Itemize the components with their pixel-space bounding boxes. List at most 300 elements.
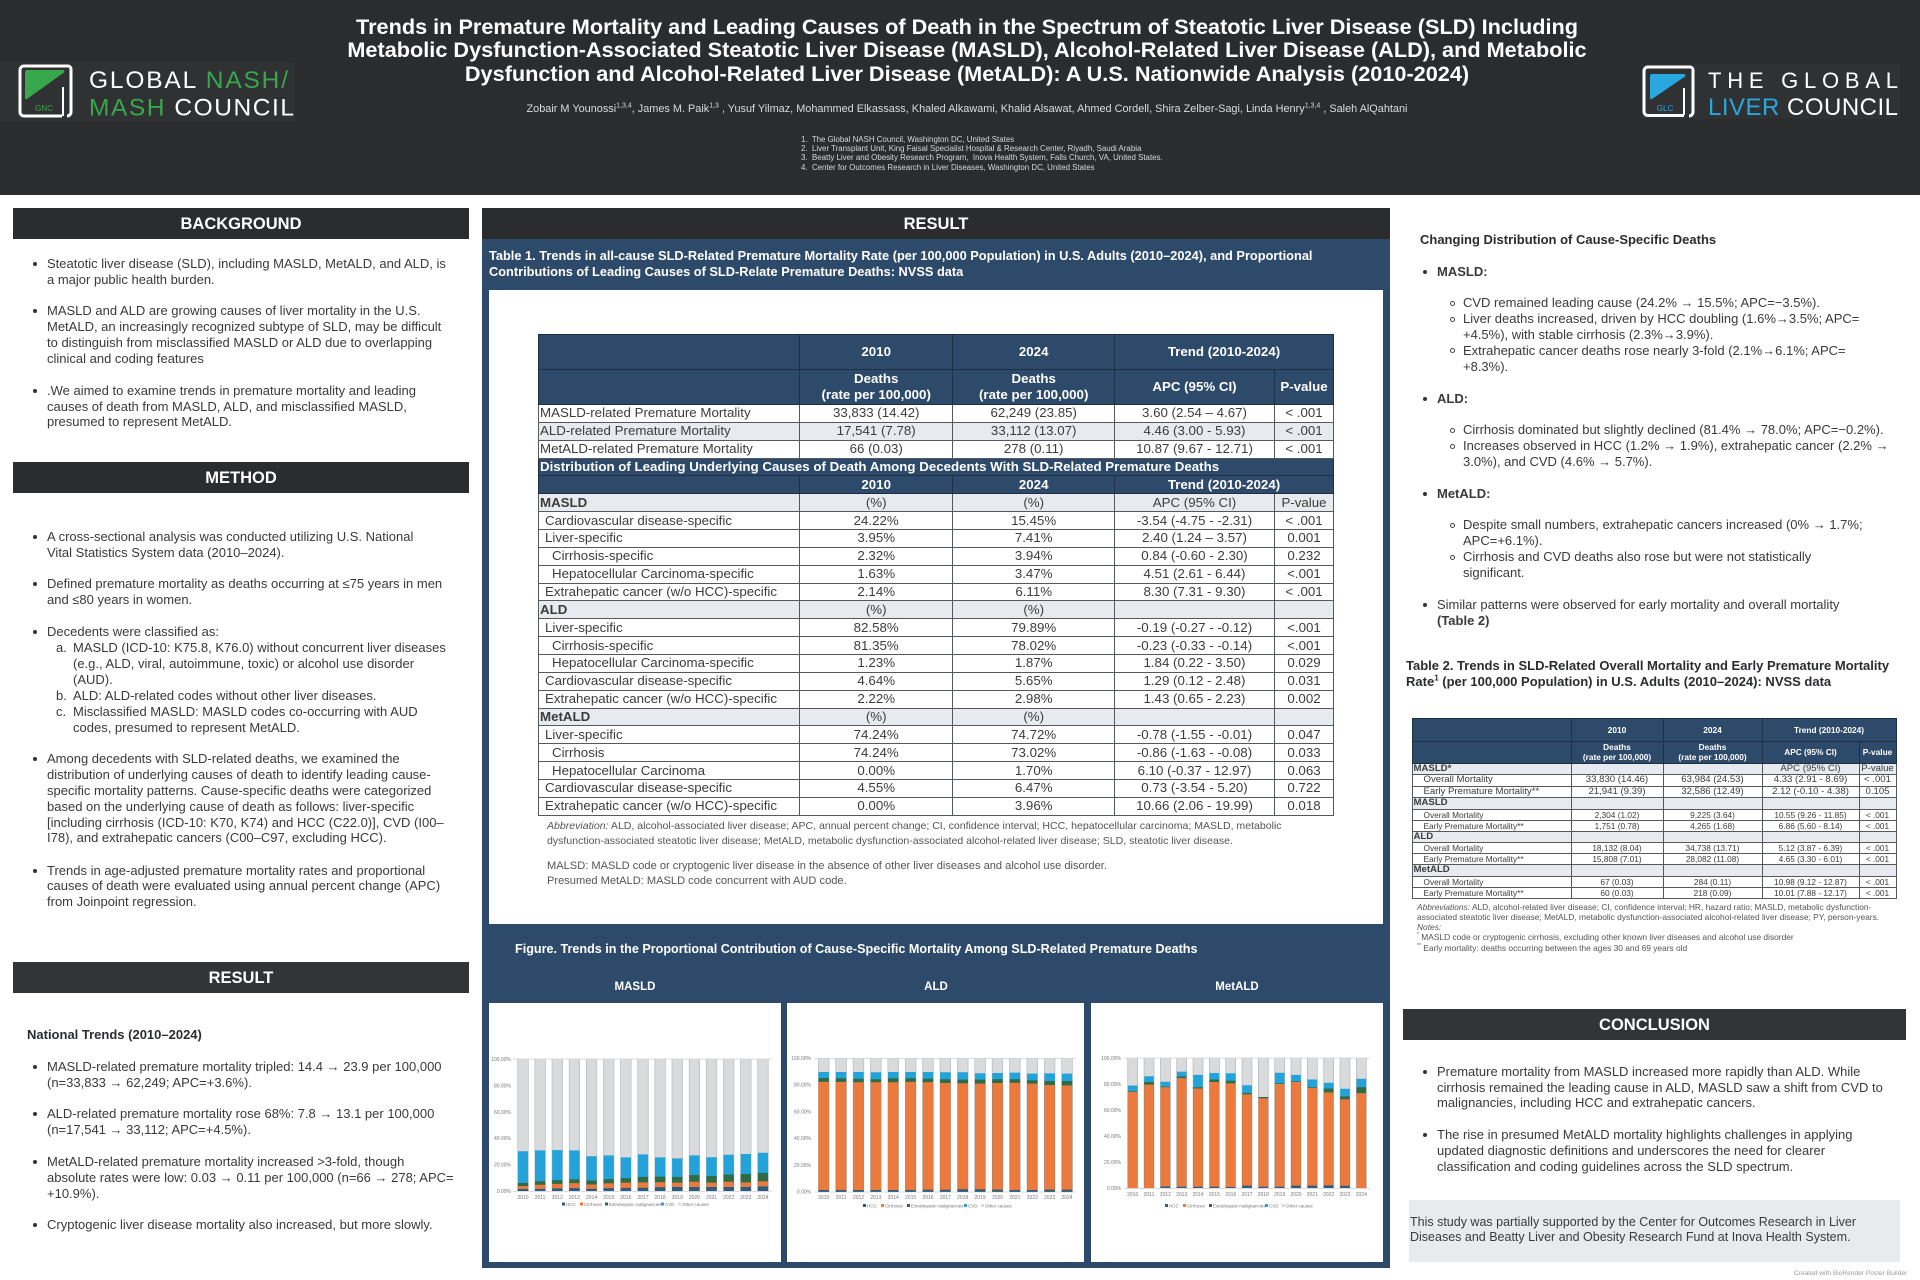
table 1: (%) xyxy=(1023,495,1044,510)
table 1: 4.64% xyxy=(857,673,895,688)
table 2: Overall Mortality xyxy=(1424,810,1483,820)
x axis labels: 2019 xyxy=(1274,1192,1285,1198)
bullet: joinpoint: from Joinpoint regression. xyxy=(47,894,197,909)
table 1: 2.14% xyxy=(857,584,895,599)
table 1: APC (95% CI) xyxy=(1152,379,1237,394)
table 1: 3.96% xyxy=(1015,798,1053,813)
bullet: SLD burden: a major public health burden. xyxy=(47,272,215,287)
table 1: 6.47% xyxy=(1015,780,1053,795)
legend: CVD xyxy=(968,1204,978,1208)
bullet: growing causes: clinical and coding features xyxy=(47,351,204,366)
conclusion text xyxy=(1423,1064,1883,1174)
table 1: MASLD xyxy=(540,495,587,510)
y axis labels: 100.00% xyxy=(791,1056,812,1062)
table 2: 63,984 (24.53) xyxy=(1681,774,1744,785)
chart heading ALD: ALD xyxy=(924,981,948,993)
bullet: cross-sectional: A cross-sectional analysis was conducted utilizing U.S. National xyxy=(47,529,413,544)
table 1: 66 (0.03) xyxy=(850,441,903,456)
footer credit: Created with BioRender Poster Builder xyxy=(1794,1270,1907,1277)
sub-list items: ALD: ALD-related codes without other liver diseases. xyxy=(73,688,376,703)
x axis labels: 2016 xyxy=(1225,1192,1236,1198)
sub-bullet not significant: Cirrhosis and CVD deaths also rose but were not statistically xyxy=(1463,549,1811,564)
table 2: 33,830 (14.46) xyxy=(1586,774,1648,785)
table 2: 2024 xyxy=(1703,725,1722,735)
bullet: MetALD trend xyxy=(47,1154,454,1202)
table 1: 2.40 (1.24 – 3.57) xyxy=(1142,530,1247,545)
bullet: SLD burden: Steatotic liver disease (SLD), including MASLD, MetALD, and ALD, is xyxy=(47,256,446,271)
bullet: decedent distribution xyxy=(47,751,444,846)
ALD sub-bullets xyxy=(1450,422,1889,469)
sub-list items: (AUD). xyxy=(73,672,113,687)
table 1: 62,249 (23.85) xyxy=(990,405,1077,420)
table 1: 5.65% xyxy=(1015,673,1053,688)
table 1: Cardiovascular disease-specific xyxy=(545,780,732,795)
y axis labels: 80.00% xyxy=(494,1084,512,1090)
x axis labels: 2022 xyxy=(1027,1195,1038,1201)
table 2: 4,265 (1.68) xyxy=(1690,820,1735,830)
y axis labels: 80.00% xyxy=(1104,1082,1122,1088)
x axis labels: 2011 xyxy=(535,1195,546,1201)
bullet: decedent distribution: [including cirrhosis (ICD-10: K70, K74) and HCC (C22.0)], CVD (I00– xyxy=(47,814,444,830)
table 1: < .001 xyxy=(1285,423,1323,438)
table 1: 0.002 xyxy=(1287,691,1321,706)
table 1: (%) xyxy=(866,495,887,510)
bullet: premature mortality definition: and ≤80 years in women. xyxy=(47,592,192,607)
table 2: 60 (0.03) xyxy=(1600,888,1634,898)
x axis labels: 2021 xyxy=(1009,1195,1021,1201)
table 2: < .001 xyxy=(1866,810,1889,820)
table 1: 82.58% xyxy=(854,620,899,635)
x axis labels: 2011 xyxy=(836,1195,847,1201)
white panel behind table 1 xyxy=(489,290,1383,924)
table 2: Early Premature Mortality** xyxy=(1424,820,1524,830)
table 1: <.001 xyxy=(1287,638,1321,653)
title: Metabolic Dysfunction-Associated Steatotic Liver Disease (MASLD), Alcohol-Related Liver Disease (ALD), and Metabolic xyxy=(347,37,1587,62)
table 1: MetALD-related Premature Mortality xyxy=(540,441,753,456)
authors: Zobair M Younossi1,3,4, James M. Paik1,3 , Yusuf Yilmaz, Mohammed Elkassass, Khaled Alkawami, Khalid Alsawat, Ahmed Cordell, Shira Zelber-Sagi, Linda Henry1,3,4 , Saleh AlQahtani xyxy=(527,102,1407,115)
heading: background xyxy=(13,208,469,239)
table 2: 5.12 (3.87 - 6.39) xyxy=(1779,843,1842,853)
affiliations xyxy=(801,134,1163,172)
table 2 notes: * MASLD code or cryptogenic cirrhosis, excluding other known liver diseases and alcohol use disorder xyxy=(1417,932,1794,942)
table 1: Trend (2010-2024) xyxy=(1168,344,1280,359)
stacked bars xyxy=(824,1058,1067,1192)
table 1: <.001 xyxy=(1287,566,1321,581)
plot lines xyxy=(815,1058,1076,1192)
table 1: 3.60 (2.54 – 4.67) xyxy=(1142,405,1247,420)
table 1: -0.86 (-1.63 - -0.08) xyxy=(1137,745,1252,760)
table 1: 0.063 xyxy=(1287,763,1321,778)
x axis labels: 2015 xyxy=(603,1195,614,1201)
table 1: Trend (2010-2024) xyxy=(1168,477,1280,492)
table 2: < .001 xyxy=(1866,820,1889,830)
table 2: Early Premature Mortality** xyxy=(1424,888,1524,898)
table 1: < .001 xyxy=(1285,405,1323,420)
sub-list items: (e.g., ALD, viral, autoimmune, toxic) or alcohol use disorder xyxy=(73,656,414,671)
affiliations: 4. Center for Outcomes Research in Liver Diseases, Washington DC, United States xyxy=(801,163,1095,172)
bullet: similar patterns xyxy=(1437,597,1839,629)
y axis labels: 0.00% xyxy=(797,1190,812,1196)
x axis labels: 2010 xyxy=(517,1195,529,1201)
table 1: 0.018 xyxy=(1287,798,1321,813)
bullet: MASLD more rapid: malignancies, including HCC and extrahepatic cancers. xyxy=(1437,1095,1756,1110)
table 2: 15,808 (7.01) xyxy=(1592,854,1642,864)
table 2: < .001 xyxy=(1866,876,1889,886)
x axis labels: 2010 xyxy=(818,1195,829,1201)
bullet: MetALD trend: +10.9%). xyxy=(47,1186,99,1201)
table 1: 0.00% xyxy=(857,798,895,813)
table 1: Hepatocellular Carcinoma-specific xyxy=(552,566,754,581)
bullet: ALD trend: (n=17,541 → 33,112; APC=+4.5%). xyxy=(47,1122,251,1137)
table 1: Deaths xyxy=(854,371,898,386)
chart: MASLD xyxy=(489,1003,781,1262)
plot lines xyxy=(1124,1058,1370,1188)
table 1: -0.23 (-0.33 - -0.14) xyxy=(1137,638,1252,653)
table 1: 3.47% xyxy=(1015,566,1053,581)
sub-list letters: b. xyxy=(56,688,67,703)
table 1: 81.35% xyxy=(854,638,899,653)
table 2 notes: ** Early mortality: deaths occurring between the ages 30 and 69 years old xyxy=(1417,943,1687,953)
x axis labels: 2016 xyxy=(620,1195,632,1201)
table 1: Hepatocellular Carcinoma xyxy=(552,763,705,778)
table 1: 17,541 (7.78) xyxy=(837,423,916,438)
table 1: (%) xyxy=(866,709,887,724)
bullet: MASLD: MASLD: xyxy=(1437,264,1488,279)
table 2: 284 (0.11) xyxy=(1694,876,1731,886)
x axis labels: 2017 xyxy=(637,1195,649,1201)
table 1: 7.41% xyxy=(1015,530,1053,545)
y axis labels: 20.00% xyxy=(494,1162,512,1168)
sub-list letters: c. xyxy=(56,704,66,719)
table 1: 33,833 (14.42) xyxy=(833,405,919,420)
table 2 title: Rate1 (per 100,000 Population) in U.S. Adults (2010–2024): NVSS data xyxy=(1406,674,1831,689)
table 2 notes: Abbreviations: ALD, alcohol-related liver disease; CI, confidence interval; HR, hazard ratio; MASLD, metabolic dysfunction- xyxy=(1417,902,1871,912)
legend: Other causes xyxy=(682,1202,710,1207)
table 1: -3.54 (-4.75 - -2.31) xyxy=(1137,513,1252,528)
affiliations: 2. Liver Transplant Unit, King Faisal Specialist Hospital & Research Center, Riyadh, Saudi Arabia xyxy=(801,144,1141,153)
x axis labels xyxy=(1127,1192,1367,1198)
bullet: MASLD more rapid: Premature mortality from MASLD increased more rapidly than ALD. While xyxy=(1437,1064,1860,1079)
title xyxy=(347,14,1587,86)
sub-bullet not significant xyxy=(1463,549,1811,581)
table 1 definitions: Presumed MetALD: MASLD code concurrent with AUD code. xyxy=(547,874,847,886)
figure title: Figure. Trends in the Proportional Contribution of Cause-Specific Mortality Among SLD-Related Premature Deaths xyxy=(515,942,1197,956)
table 2: 6.86 (5.60 - 8.14) xyxy=(1779,820,1842,830)
table 2: 21,941 (9.39) xyxy=(1588,786,1646,797)
legend xyxy=(562,1202,710,1207)
table 1: 2010 xyxy=(861,344,891,359)
y axis labels: 20.00% xyxy=(794,1163,812,1169)
table 1: 2024 xyxy=(1019,344,1048,359)
table 1: 0.722 xyxy=(1287,780,1321,795)
table 2: < .001 xyxy=(1866,888,1889,898)
title: Trends in Premature Mortality and Leading Causes of Death in the Spectrum of Steatotic Liver Disease (SLD) Including xyxy=(356,14,1578,39)
table 1: 6.11% xyxy=(1015,584,1052,599)
table 2 title xyxy=(1406,658,1889,689)
table 1: (rate per 100,000) xyxy=(979,387,1088,402)
bullet: decedent distribution: Among decedents with SLD-related deaths, we examined the xyxy=(47,751,400,766)
table 1: (%) xyxy=(1023,709,1044,724)
table 1: 15.45% xyxy=(1011,513,1056,528)
table 1: ALD-related Premature Mortality xyxy=(540,423,731,438)
y axis labels: 40.00% xyxy=(494,1136,512,1142)
table 1: Liver-specific xyxy=(545,727,623,742)
MASLD sub-bullets xyxy=(1450,295,1859,374)
x axis labels: 2013 xyxy=(569,1195,580,1201)
table 1: 0.033 xyxy=(1287,745,1321,760)
x axis labels: 2013 xyxy=(1176,1192,1187,1198)
table 1: APC (95% CI) xyxy=(1153,495,1236,510)
bullet: MetALD rise: updated diagnostic definitions and underscores the need for clearer xyxy=(1437,1143,1825,1158)
table 1: ALD xyxy=(540,602,567,617)
bullet: MASLD more rapid: cirrhosis remained the leading cause in ALD, MASLD saw a shift from CVD to xyxy=(1437,1080,1883,1095)
sub-bullet liver deaths xyxy=(1463,311,1859,343)
table 2: 2010 xyxy=(1608,725,1626,735)
table 2: 2,304 (1.02) xyxy=(1595,810,1639,820)
x axis labels: 2023 xyxy=(740,1195,752,1201)
table 2 notes: Notes: xyxy=(1417,922,1441,932)
stacked bars xyxy=(523,1059,763,1191)
legend: HCC xyxy=(1169,1204,1179,1208)
table 1: Cirrhosis xyxy=(552,745,604,760)
heading: result left xyxy=(13,962,469,993)
legend xyxy=(1165,1204,1314,1208)
heading: conclusion: CONCLUSION xyxy=(1599,1016,1710,1034)
table 1: Cirrhosis-specific xyxy=(552,638,653,653)
table 2: Trend (2010-2024) xyxy=(1794,725,1864,735)
table 1: 1.84 (0.22 - 3.50) xyxy=(1143,655,1245,670)
bullet: cryptogenic: Cryptogenic liver disease mortality also increased, but more slowly. xyxy=(47,1217,433,1232)
y axis labels xyxy=(791,1056,812,1196)
table 1: 0.047 xyxy=(1287,727,1321,742)
sub-list items: MASLD (ICD-10: K75.8, K76.0) without concurrent liver diseases xyxy=(73,640,446,655)
sub-list letters xyxy=(56,640,67,719)
table 1: Liver-specific xyxy=(545,530,623,545)
MetALD sub-bullets xyxy=(1450,517,1863,580)
table 2: MetALD xyxy=(1414,864,1450,875)
sub-bullet increases xyxy=(1463,438,1889,470)
table 1: 74.24% xyxy=(854,745,899,760)
bullet: decedents classified: Decedents were classified as: xyxy=(47,624,219,639)
table 1: 0.00% xyxy=(857,763,895,778)
table 1: 2.22% xyxy=(857,691,895,706)
table 1 abbreviations xyxy=(546,820,1282,846)
funding text xyxy=(1410,1214,1856,1244)
table 2: < .001 xyxy=(1866,843,1889,853)
table 1 abbreviations: dysfunction-associated steatotic liver disease; MetALD, metabolic dysfunction-associated alcohol-related liver disease; SLD, steatotic liver disease. xyxy=(547,834,1233,846)
x axis labels: 2011 xyxy=(1144,1192,1155,1198)
subheading: Changing Distribution of Cause-Specific Deaths xyxy=(1420,232,1716,247)
table 2: 28,082 (11.08) xyxy=(1686,854,1739,864)
changing distribution text xyxy=(1420,232,1889,628)
table 1 title xyxy=(489,248,1312,279)
table 2: 34,738 (13.71) xyxy=(1686,843,1739,853)
y axis labels: 0.00% xyxy=(497,1189,512,1195)
bullet: similar patterns: (Table 2) xyxy=(1437,613,1490,628)
bullet: decedent distribution: based on the underlying cause of death as follows: liver-specific xyxy=(47,799,414,814)
table 2: MASLD* xyxy=(1414,763,1451,774)
table 2: 32,586 (12.49) xyxy=(1681,786,1744,797)
table 1: 1.87% xyxy=(1015,655,1053,670)
logo: Global NASH/MASH Council: GNC xyxy=(35,104,53,113)
table 2: Overall Mortality xyxy=(1424,843,1483,853)
table 1: <.001 xyxy=(1287,620,1321,635)
bullet: aim xyxy=(47,383,416,430)
funding text: Diseases and Beatty Liver and Obesity Research Fund at Inova Health System. xyxy=(1410,1230,1851,1244)
logo: The Global Liver Council: GLC xyxy=(1657,104,1673,113)
table 1: 2.98% xyxy=(1015,691,1053,706)
sub-list items: Misclassified MASLD: MASLD codes co-occurring with AUD xyxy=(73,704,418,719)
sub-list letters: a. xyxy=(56,640,67,655)
x axis labels: 2012 xyxy=(552,1195,563,1201)
table 1: 74.24% xyxy=(854,727,899,742)
table 1: 33,112 (13.07) xyxy=(991,423,1076,438)
table 1 abbreviations: Abbreviation: ALD, alcohol-associated liver disease; APC, annual percent change; CI, confidence interval; HCC, hepatocellular carcinoma; MASLD, metabolic xyxy=(547,820,1282,832)
bullet: decedent distribution: distribution of underlying causes of death to identify leading cause- xyxy=(47,767,431,782)
table 2: 9,225 (3.64) xyxy=(1690,810,1735,820)
title: Dysfunction and Alcohol-Related Liver Disease (MetALD): A U.S. Nationwide Analysis (2010-2024) xyxy=(465,61,1469,86)
sub-bullet small numbers: APC=+6.1%). xyxy=(1463,533,1542,548)
table 1: MASLD-related Premature Mortality xyxy=(540,405,751,420)
table 1 title: Table 1. Trends in all-cause SLD-Related Premature Mortality Rate (per 100,000 Population) in U.S. Adults (2010–2024), and Proportional xyxy=(489,248,1312,263)
x axis labels: 2022 xyxy=(1323,1192,1334,1198)
bullet: MetALD trend: absolute rates were low: 0.03 → 0.11 per 100,000 (n=66 → 278; APC= xyxy=(47,1170,454,1185)
legend: HCC xyxy=(566,1202,576,1207)
table 2: Overall Mortality xyxy=(1424,774,1493,785)
table 2: 10.01 (7.88 - 12.17) xyxy=(1774,888,1847,898)
x axis labels: 2018 xyxy=(957,1195,968,1201)
table 2: 1,751 (0.78) xyxy=(1595,820,1639,830)
table 1: Cardiovascular disease-specific xyxy=(545,513,732,528)
national trends xyxy=(27,1027,454,1232)
logo: The Global Liver Council xyxy=(1642,66,1898,121)
legend: HCC xyxy=(867,1204,877,1208)
bullet: joinpoint xyxy=(47,862,440,910)
table 1: 74.72% xyxy=(1011,727,1056,742)
table 1: Cirrhosis-specific xyxy=(552,548,653,563)
legend: Extrahepatic malignancies xyxy=(609,1202,662,1207)
x axis labels: 2020 xyxy=(689,1195,700,1201)
legend: Extrahepatic malignancies xyxy=(1213,1204,1266,1208)
chart: ALD xyxy=(787,1003,1084,1262)
table 2: 10.98 (9.12 - 12.87) xyxy=(1774,876,1847,886)
table 2: APC (95% CI) xyxy=(1780,763,1841,774)
table 1: P-value xyxy=(1280,379,1328,394)
x axis labels: 2024 xyxy=(757,1195,769,1201)
table 2 title: Table 2. Trends in SLD-Related Overall Mortality and Early Premature Mortality xyxy=(1406,658,1889,673)
sub-bullet not significant: significant. xyxy=(1463,565,1524,580)
x axis labels: 2014 xyxy=(586,1195,597,1201)
bullet: cross-sectional xyxy=(47,529,413,561)
x axis labels: 2024 xyxy=(1061,1195,1073,1201)
legend: Other causes xyxy=(985,1204,1013,1208)
sub-bullet extrahepatic: +8.3%). xyxy=(1463,359,1508,374)
table 1: Extrahepatic cancer (w/o HCC)-specific xyxy=(545,691,777,706)
bullet: MASLD more rapid xyxy=(1437,1064,1883,1111)
logo: Global NASH/MASH Council: MASH COUNCIL xyxy=(89,94,294,122)
legend xyxy=(863,1204,1013,1208)
header banner xyxy=(0,0,1920,195)
sub-bullet CVD: CVD remained leading cause (24.2% → 15.5%; APC=−3.5%). xyxy=(1463,295,1820,310)
bullet: MASLD trend xyxy=(47,1059,442,1090)
table 2: Deaths xyxy=(1699,742,1726,752)
x axis labels: 2012 xyxy=(853,1195,864,1201)
affiliations: 3. Beatty Liver and Obesity Research Program, Inova Health System, Falls Church, VA, United States. xyxy=(801,153,1163,162)
table 2: (rate per 100,000) xyxy=(1583,752,1651,762)
plot lines xyxy=(513,1059,772,1192)
table 2: P-value xyxy=(1863,747,1892,757)
table 1: (rate per 100,000) xyxy=(821,387,931,402)
table 1: Extrahepatic cancer (w/o HCC)-specific xyxy=(545,584,777,599)
heading: result left: RESULT xyxy=(209,969,273,987)
table 1: 8.30 (7.31 - 9.30) xyxy=(1143,584,1245,599)
bullet: MetALD rise xyxy=(1437,1127,1852,1175)
background text xyxy=(33,256,446,429)
table 2: 4.65 (3.30 - 6.01) xyxy=(1779,854,1842,864)
x axis labels: 2024 xyxy=(1356,1192,1367,1198)
table 1: Extrahepatic cancer (w/o HCC)-specific xyxy=(545,798,777,813)
heading: method: METHOD xyxy=(205,469,277,487)
table 1: (%) xyxy=(866,602,887,617)
table 1: Deaths xyxy=(1012,371,1056,386)
bullet: decedent distribution: I78), and extrahepatic cancers (C00–C97, excluding HCC). xyxy=(47,830,387,845)
x axis labels: 2018 xyxy=(1258,1192,1269,1198)
y axis labels: 100.00% xyxy=(491,1057,512,1063)
table 1: 2.32% xyxy=(857,548,895,563)
table 1: 0.031 xyxy=(1287,673,1321,688)
x axis labels: 2015 xyxy=(1209,1192,1220,1198)
x axis labels xyxy=(517,1195,769,1201)
logo: Global NASH/MASH Council xyxy=(18,64,294,122)
x axis labels: 2013 xyxy=(870,1195,882,1201)
table 2: 18,132 (8.04) xyxy=(1592,843,1642,853)
x axis labels: 2019 xyxy=(672,1195,683,1201)
bullet: aim: presumed to represent MetALD. xyxy=(47,414,232,429)
bullet: MetALD rise: classification and coding guidelines across the SLD spectrum. xyxy=(1437,1159,1793,1174)
legend: CVD xyxy=(665,1202,675,1207)
table 1: 4.55% xyxy=(857,780,895,795)
bullet: joinpoint: causes of death were evaluated using annual percent change (APC) xyxy=(47,878,440,893)
table 2: 2.12 (-0.10 - 4.38) xyxy=(1772,786,1849,797)
logo: The Global Liver Council: LIVER COUNCIL xyxy=(1708,94,1898,121)
y axis labels: 80.00% xyxy=(794,1083,812,1089)
stacked bars xyxy=(1133,1058,1361,1188)
table 2: 10.55 (9.26 - 11.85) xyxy=(1774,810,1847,820)
bullet: joinpoint: Trends in age-adjusted premature mortality rates and proportional xyxy=(47,862,425,878)
table 2: 218 (0.09) xyxy=(1694,888,1731,898)
y axis labels: 60.00% xyxy=(1104,1108,1122,1114)
bullet: MetALD trend: MetALD-related premature mortality increased >3-fold, though xyxy=(47,1154,404,1169)
sub-list items: codes, presumed to represent MetALD. xyxy=(73,720,300,735)
funding box xyxy=(1409,1200,1900,1262)
sub-list items xyxy=(73,640,446,735)
table 2: 0.105 xyxy=(1866,786,1890,797)
heading: conclusion xyxy=(1403,1009,1906,1040)
legend: Extrahepatic malignancies xyxy=(911,1204,964,1208)
x axis labels: 2018 xyxy=(655,1195,666,1201)
sub-bullet increases: Increases observed in HCC (1.2% → 1.9%), extrahepatic cancer (2.2% → xyxy=(1463,438,1889,453)
table 1: 73.02% xyxy=(1011,745,1056,760)
table 1: Cardiovascular disease-specific xyxy=(545,673,732,688)
table 1: 1.29 (0.12 - 2.48) xyxy=(1143,673,1245,688)
affiliations: 1. The Global NASH Council, Washington DC, United States xyxy=(801,134,1014,144)
chart heading MetALD: MetALD xyxy=(1215,981,1259,993)
table 1: (%) xyxy=(1023,602,1044,617)
table 1: P-value xyxy=(1281,495,1327,510)
sub-bullet small numbers xyxy=(1463,517,1863,549)
table 1: 10.66 (2.06 - 19.99) xyxy=(1136,798,1253,813)
table 1: 0.029 xyxy=(1287,655,1321,670)
